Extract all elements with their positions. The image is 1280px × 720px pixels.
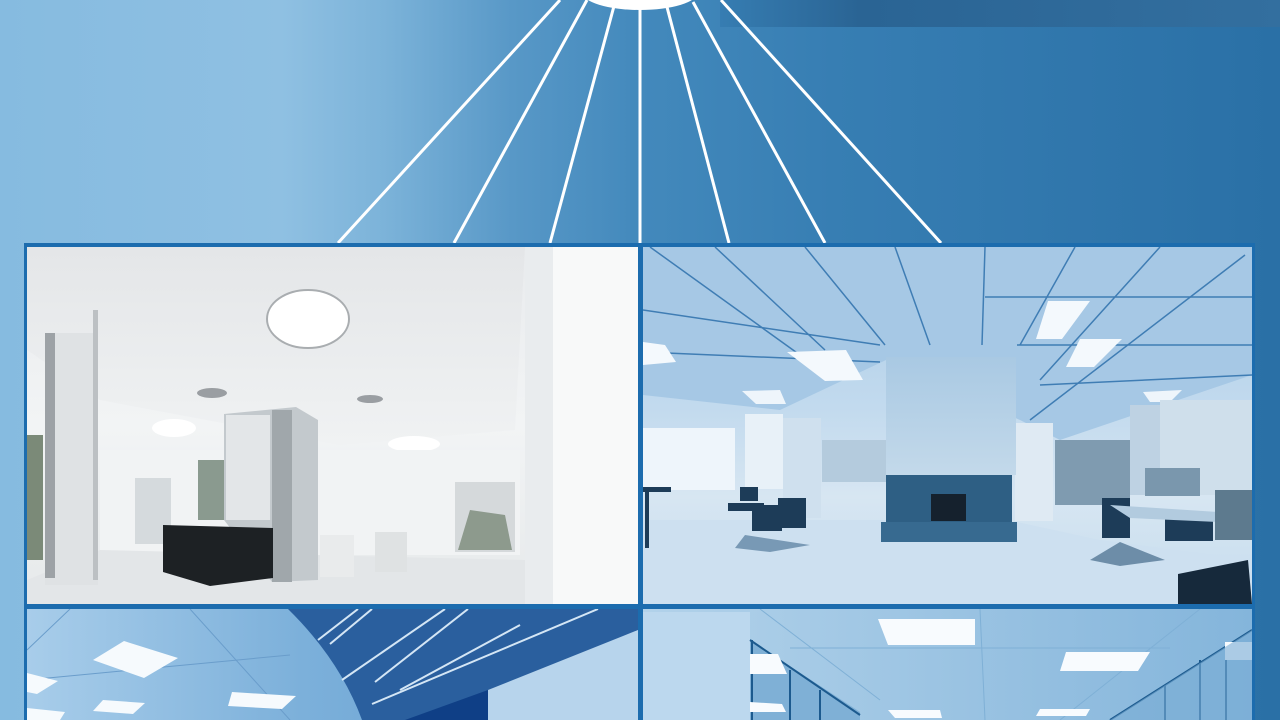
black reception desk [163, 525, 273, 586]
central pillar [224, 407, 318, 582]
ceiling light panels [1036, 301, 1090, 339]
ceiling lamp [582, 0, 698, 10]
white column right [553, 247, 638, 604]
left wall [643, 612, 750, 720]
panel: blue office photo [643, 247, 1252, 604]
windows left [643, 428, 735, 490]
windows right [1160, 400, 1252, 428]
desks right [1102, 498, 1213, 541]
ceiling grid [760, 609, 1200, 720]
corridor glass [750, 640, 860, 720]
floor [643, 520, 1252, 604]
panel: lower right corridor photo [643, 609, 1252, 720]
panel: lower left ceiling photo [27, 609, 638, 720]
foreground dark cabinet [1178, 560, 1252, 604]
panel: white lobby photo [27, 247, 638, 604]
desks and chairs left [643, 487, 806, 548]
ceiling panels [93, 641, 178, 678]
photo frame [24, 243, 1255, 720]
display boxes [320, 535, 354, 577]
light rays [338, 0, 941, 243]
curved dark ceiling [288, 609, 638, 720]
top dark bar [720, 0, 1280, 27]
glass right [1110, 630, 1252, 720]
back room [398, 450, 430, 452]
column right [1015, 423, 1053, 521]
ceiling [643, 280, 1252, 440]
ceiling [27, 247, 525, 445]
chair bases left [735, 535, 810, 552]
round ceiling light [267, 290, 349, 348]
floor [100, 550, 163, 555]
small ceiling lights [152, 419, 196, 437]
grid lines [27, 609, 290, 720]
ceiling panels [878, 619, 975, 645]
left wall column [55, 333, 93, 568]
ceiling grid [643, 247, 1252, 420]
linear light strips [318, 609, 598, 704]
central fireplace column [886, 357, 1016, 475]
